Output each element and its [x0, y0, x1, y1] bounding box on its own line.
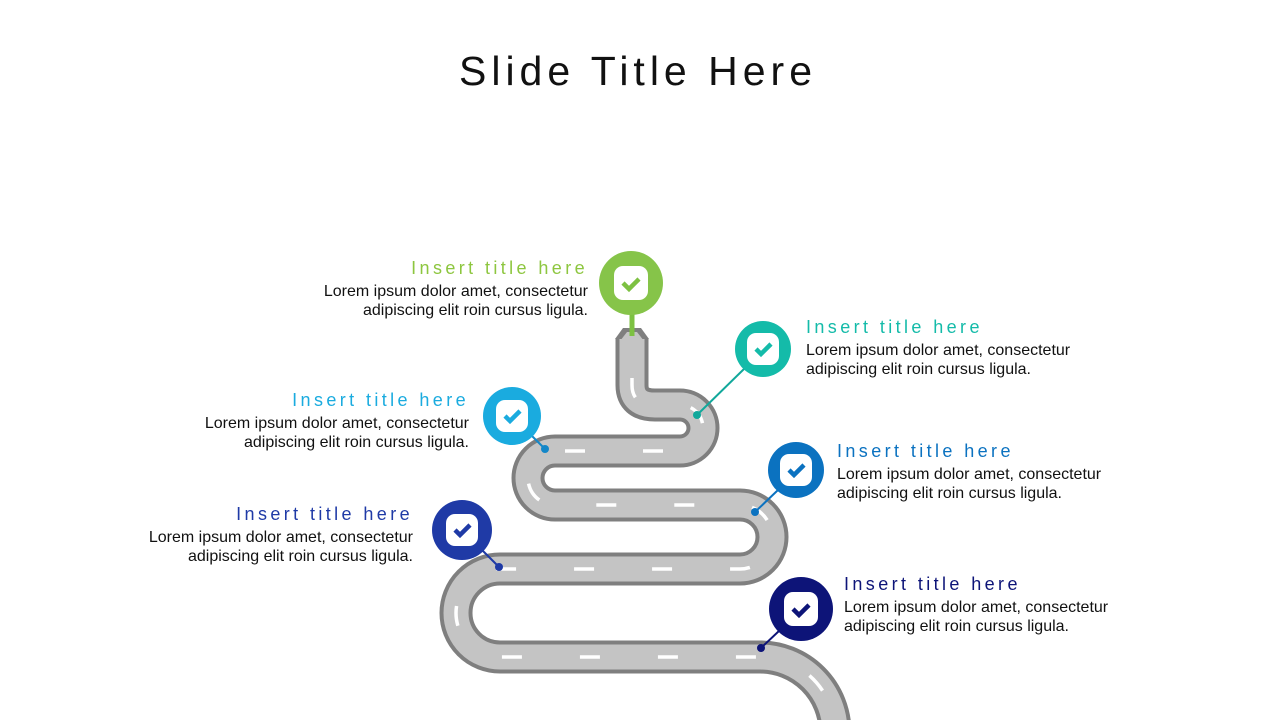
pin: dark blue [432, 500, 492, 560]
connector lines [482, 368, 780, 652]
text block 4: adipiscing elit roin cursus ligula. [837, 485, 1062, 502]
pin: navy [769, 577, 833, 641]
text block 5 [149, 504, 414, 565]
text block 5: Lorem ipsum dolor amet, consectetur [149, 529, 414, 546]
text block 4: Insert title here [837, 441, 1014, 461]
text block 1 [324, 258, 589, 319]
text block 1: Lorem ipsum dolor amet, consectetur [324, 283, 589, 300]
text block 1: Insert title here [411, 258, 588, 278]
text block 1: adipiscing elit roin cursus ligula. [363, 302, 588, 319]
text block 6 [844, 574, 1109, 635]
text block 2: Lorem ipsum dolor amet, consectetur [806, 342, 1071, 359]
text block 6: Lorem ipsum dolor amet, consectetur [844, 599, 1109, 616]
pin: green [599, 251, 663, 315]
connector: green [630, 305, 634, 336]
text block 5: Insert title here [236, 504, 413, 524]
text block 2: Insert title here [806, 317, 983, 337]
text block 3: Lorem ipsum dolor amet, consectetur [205, 415, 470, 432]
pin: blue [768, 442, 824, 498]
text block 6: adipiscing elit roin cursus ligula. [844, 618, 1069, 635]
text block 5: adipiscing elit roin cursus ligula. [188, 548, 413, 565]
text block 4: Lorem ipsum dolor amet, consectetur [837, 466, 1102, 483]
text block 3: Insert title here [292, 390, 469, 410]
pin: teal [735, 321, 791, 377]
pin: light blue [483, 387, 541, 445]
text block 2: adipiscing elit roin cursus ligula. [806, 361, 1031, 378]
text block 4 [837, 441, 1102, 502]
road [456, 328, 835, 720]
title: Slide Title Here [459, 48, 817, 94]
text block 6: Insert title here [844, 574, 1021, 594]
text block 3: adipiscing elit roin cursus ligula. [244, 434, 469, 451]
text block 2 [806, 317, 1071, 378]
text block 3 [205, 390, 470, 451]
